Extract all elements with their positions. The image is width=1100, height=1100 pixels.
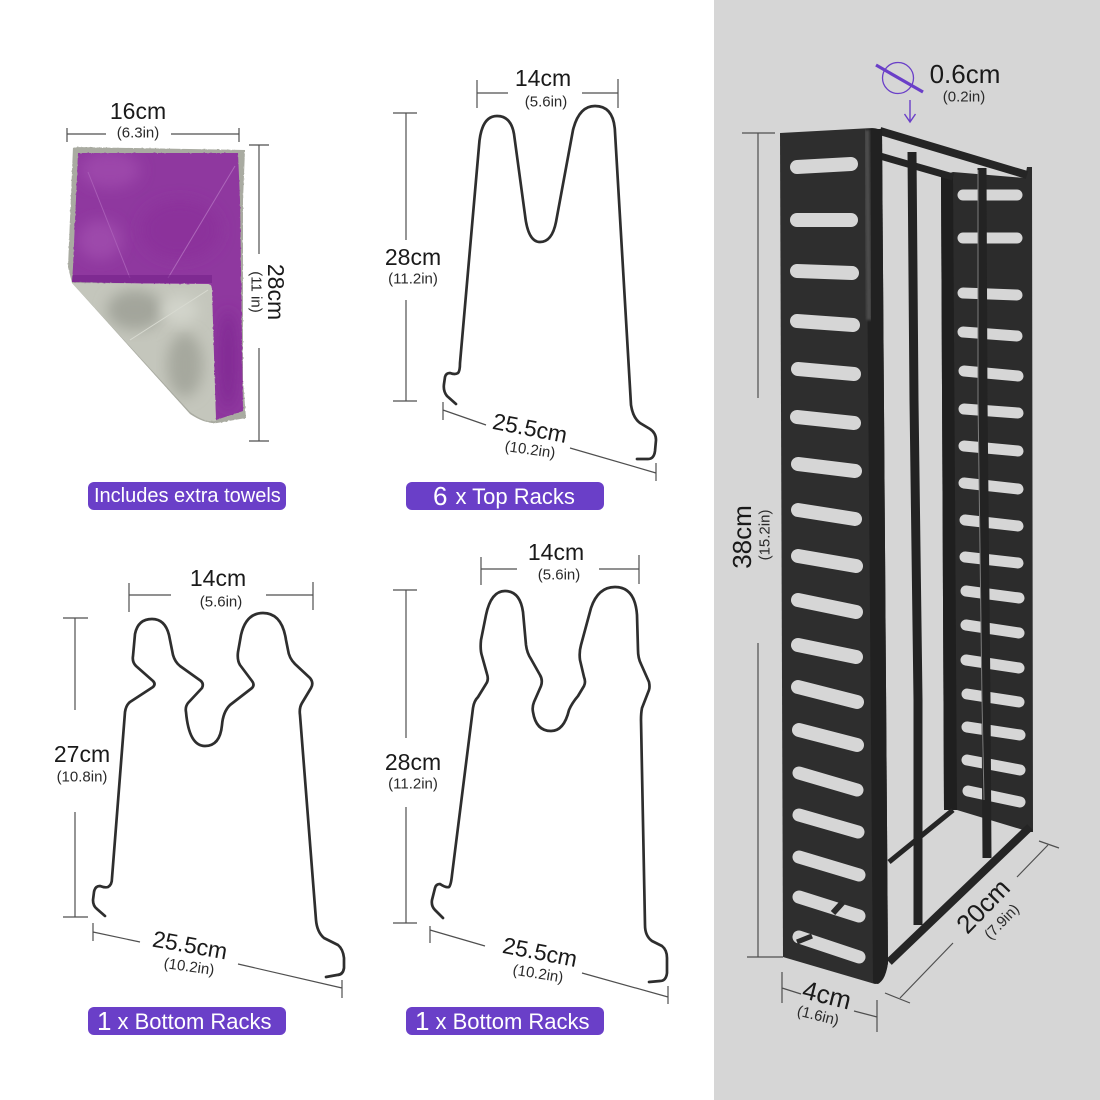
- dimension: rack B height: [385, 590, 441, 923]
- front panel: [780, 128, 888, 984]
- dimension: rack A base: (10.2in): [163, 955, 215, 979]
- dimension: rack width: (1.6in): [795, 1003, 841, 1029]
- dimension: rack A height: (10.8in): [57, 768, 107, 786]
- label: 6 x top racks: 6 x Top Racks: [433, 481, 575, 511]
- towel photo: [68, 147, 246, 423]
- dimension: top rack width: 14cm: [515, 65, 571, 91]
- dimension: towel width: [67, 98, 239, 142]
- wire: bottom rack A: [93, 613, 344, 977]
- dimension: rack B base: 25.5cm: [500, 932, 580, 972]
- dimension: rack A base: 25.5cm: [151, 926, 229, 964]
- dimension: top rack width: (5.6in): [525, 94, 567, 110]
- dimension: top rack height: (11.2in): [388, 270, 438, 288]
- dimension: rack height: (15.2in): [756, 510, 774, 560]
- dimension: rack B height: (11.2in): [388, 776, 438, 792]
- dimension: rack B width: [481, 539, 639, 585]
- panel: gray rack background: [714, 0, 1100, 1100]
- dimension: rack depth: 20cm: [950, 873, 1016, 939]
- panel: bottom rack A: [54, 565, 344, 1036]
- back panel: [941, 167, 1033, 832]
- dimension: rack A height: [54, 618, 110, 917]
- dimension: rack depth: [885, 841, 1059, 1003]
- dimension: top rack height: [385, 113, 441, 401]
- dimension: towel height: (11 in): [248, 271, 264, 313]
- dimension: towel height: [248, 145, 289, 441]
- dimension: rack A width: [129, 565, 313, 612]
- dimension: rack B base: (10.2in): [512, 962, 564, 986]
- dimension: top rack base: 25.5cm: [490, 408, 570, 448]
- dimension: rack B width: 14cm: [528, 539, 584, 565]
- dimension: rack A width: 14cm: [190, 565, 246, 591]
- dimension: wire thickness: 0.6cm: [930, 59, 1000, 89]
- dimension: rack width: [782, 972, 877, 1032]
- dimension: rack width: 4cm: [800, 975, 854, 1015]
- dimension: towel width: (6.3in): [117, 124, 159, 142]
- dimension: top rack base: (10.2in): [504, 438, 556, 462]
- wire: bottom rack B: [432, 587, 667, 982]
- dimension: rack B width: (5.6in): [538, 566, 580, 584]
- dimension: rack B base: [430, 926, 668, 1004]
- panel: assembled rack: [727, 59, 1059, 1032]
- dimension: rack A base: [93, 923, 342, 998]
- panel: top rack: [385, 65, 656, 511]
- dimension: top rack height: 28cm: [385, 244, 441, 270]
- dimension: rack height: [727, 133, 783, 957]
- dimension: wire thickness: (0.2in): [943, 88, 985, 106]
- back rails: [880, 131, 1030, 962]
- dimension: wire thickness: [930, 59, 1000, 106]
- dimension: top rack base: [443, 402, 656, 481]
- label: 1 x bottom racks: 1 x Bottom Racks: [97, 1006, 272, 1036]
- label: 1 x bottom racks: 1 x Bottom Racks: [415, 1006, 590, 1036]
- dimension: rack depth: (7.9in): [981, 901, 1023, 943]
- wire: top rack: [444, 106, 656, 459]
- dimension: towel height: 28cm: [263, 264, 289, 320]
- rack wires: [912, 152, 987, 925]
- label: includes extra towels: Includes extra towels: [94, 485, 281, 507]
- panel: towel: [67, 98, 289, 510]
- dimension: top rack width: [477, 65, 618, 110]
- panel: bottom rack B: [385, 539, 668, 1036]
- dimension: towel width: 16cm: [110, 98, 166, 124]
- dimension: rack B height: 28cm: [385, 749, 441, 775]
- dimension: rack A height: 27cm: [54, 741, 110, 767]
- dimension: rack A width: (5.6in): [200, 594, 242, 610]
- icon: wire diameter: [876, 62, 923, 122]
- dimension: rack height: 38cm: [727, 505, 757, 569]
